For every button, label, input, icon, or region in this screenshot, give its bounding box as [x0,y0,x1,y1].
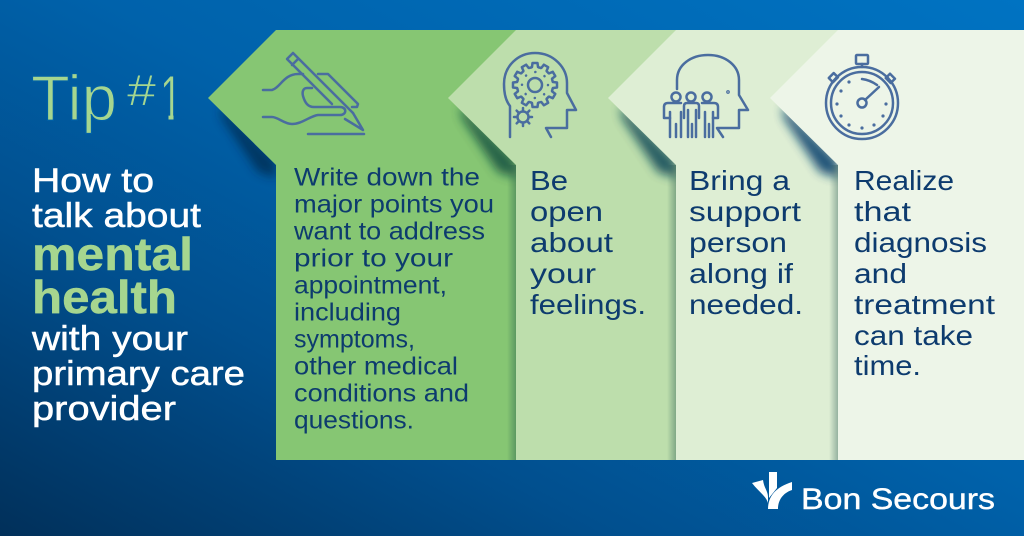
logo: Bon Secours: Bon Secours [801,483,995,516]
heading: how to talk about mental health: How to [32,162,154,200]
text: panel 4 tip: that [854,196,911,227]
text: panel 1 tip [293,164,494,434]
logo: Bon Secours [752,472,995,516]
text: panel 1 tip: Write down the [294,164,480,192]
text: panel 2 tip: about [530,227,613,258]
text: panel 4 tip: time. [854,350,921,381]
text: panel 1 tip: including [294,298,401,326]
heading: how to talk about mental health [31,162,245,428]
heading: how to talk about mental health: primary care [32,355,245,393]
text: panel 1 tip: want to address [293,218,485,246]
heading: Tip #1: Tip [31,62,117,134]
text: panel 2 tip: Be [530,165,568,196]
icon: hand writing with pencil [263,53,364,134]
text: panel 2 tip: open [530,196,603,227]
panel: realize time [770,30,1024,460]
text: panel 3 tip: support [689,196,801,227]
heading: how to talk about mental health: with your [31,320,188,358]
text: panel 1 tip: questions. [294,406,414,434]
text: panel 1 tip: conditions and [294,380,469,408]
heading: Tip #1: 1 [160,62,182,134]
panel: be open [448,30,680,460]
text: panel 1 tip: other medical [294,352,458,380]
panel: write down points [208,30,520,460]
text: panel 1 tip: symptoms, [294,326,415,354]
text: panel 1 tip: appointment, [294,272,447,300]
heading: Tip #1: # [127,66,157,115]
panel 1 shadow [220,105,276,178]
panel 3 shadow [620,105,676,460]
heading: how to talk about mental health: provider [32,390,176,428]
text: panel 2 tip: feelings. [530,289,646,320]
text: panel 2 tip: your [530,258,596,289]
heading: how to talk about mental health: health [32,271,177,323]
text: panel 4 tip: diagnosis [854,227,987,258]
panel: support person [608,30,842,460]
text: panel 4 tip: treatment [854,289,995,320]
text: panel 3 tip: needed. [689,289,803,320]
text: panel 3 tip: Bring a [689,165,790,196]
panel 4 shadow [782,105,838,460]
text: panel 3 tip [689,165,803,320]
text: panel 4 tip: and [854,258,907,289]
text: panel 3 tip: person [689,227,787,258]
text: panel 4 tip: Realize [854,165,954,196]
text: panel 4 tip [854,165,995,381]
heading: Tip #1 [33,74,174,134]
panel 2 shadow [460,105,516,460]
heading: how to talk about mental health: mental [32,228,193,280]
text: panel 1 tip: prior to your [294,244,453,272]
icon: head with support people [664,55,748,137]
text: panel 3 tip: along if [689,258,793,289]
text: panel 4 tip: can take [854,320,973,351]
icon: head with gears [504,53,576,137]
text: panel 2 tip [530,165,646,320]
heading: how to talk about mental health: talk about [32,197,202,235]
text: panel 1 tip: major points you [294,190,494,218]
icon: stopwatch [826,55,898,139]
